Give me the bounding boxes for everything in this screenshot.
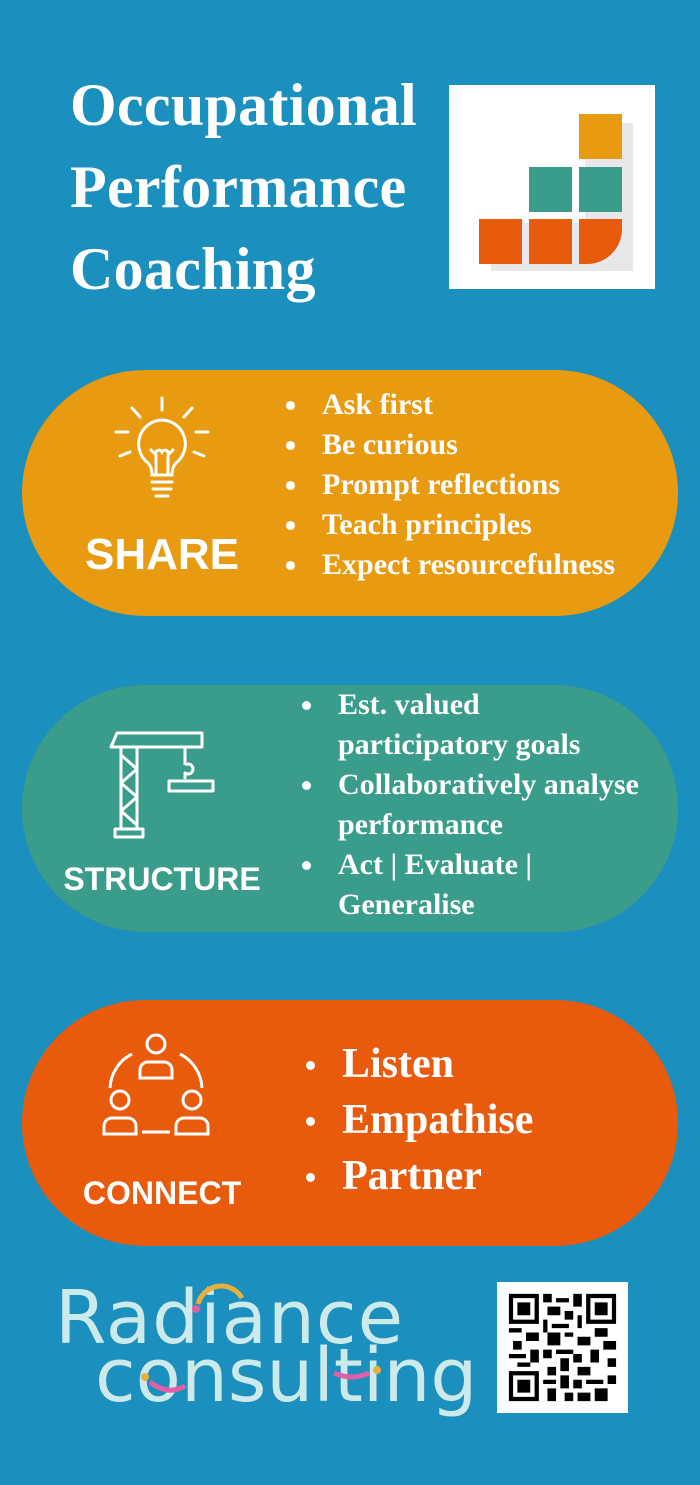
bullet list: structure: participatory goals bbox=[338, 728, 580, 761]
title: Occupational bbox=[70, 72, 417, 138]
label: structure: STRUCTURE bbox=[63, 861, 261, 897]
panel: share bbox=[22, 370, 678, 616]
icon: people network bbox=[102, 1034, 210, 1136]
bullet list: structure: Generalise bbox=[338, 888, 475, 921]
logo: radiance consulting: consulting bbox=[95, 1333, 477, 1419]
label: connect: CONNECT bbox=[83, 1175, 241, 1211]
qr code bbox=[497, 1282, 628, 1413]
icon: lightbulb bbox=[114, 396, 210, 498]
bullet list: structure bbox=[302, 688, 639, 921]
bullet list: structure: Collaboratively analyse bbox=[338, 768, 639, 801]
bullet list: structure: Act | Evaluate | bbox=[338, 848, 532, 881]
bullet list: share: Prompt reflections bbox=[322, 468, 560, 501]
bullet list: connect: Empathise bbox=[342, 1097, 533, 1143]
bullet list: share: Ask first bbox=[322, 388, 433, 421]
bullet list: share: Teach principles bbox=[322, 508, 532, 541]
title: Performance bbox=[70, 154, 406, 220]
bullet list: connect bbox=[306, 1041, 533, 1199]
bullet list: share: Be curious bbox=[322, 428, 458, 461]
panel: connect bbox=[22, 1000, 678, 1246]
icon: crane bbox=[110, 732, 214, 838]
bullet list: share bbox=[286, 388, 615, 581]
bullet list: connect: Listen bbox=[342, 1041, 454, 1087]
panel: structure bbox=[22, 685, 678, 932]
bullet list: structure: performance bbox=[338, 808, 503, 841]
logo: radiance consulting bbox=[55, 1275, 477, 1419]
bullet list: share: Expect resourcefulness bbox=[322, 548, 615, 581]
logo box bbox=[449, 85, 655, 289]
bullet list: connect: Partner bbox=[342, 1153, 482, 1199]
bullet list: structure: Est. valued bbox=[338, 688, 480, 721]
logo: radiance consulting: Radiance bbox=[55, 1275, 404, 1361]
label: share: SHARE bbox=[85, 530, 239, 579]
title: Coaching bbox=[70, 236, 316, 302]
title bbox=[70, 72, 417, 302]
